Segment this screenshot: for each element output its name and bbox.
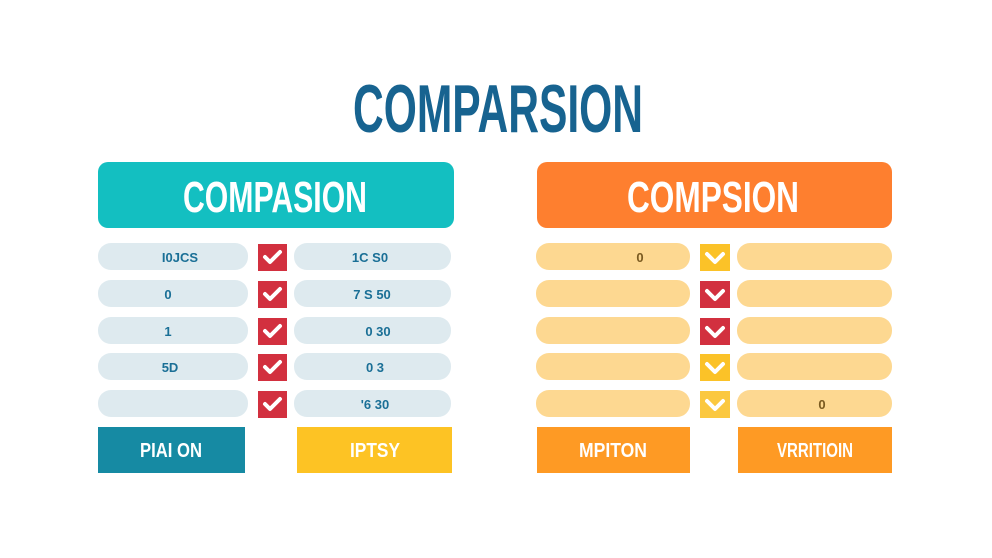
rows: right	[536, 243, 892, 417]
button: PIAI ON: PIAI ON	[140, 440, 202, 462]
rows: left: 7 S 50	[353, 287, 391, 302]
rows: right: 0	[636, 250, 644, 265]
button: MPITON	[537, 427, 690, 473]
button: VRRITIOIN	[738, 427, 892, 473]
button: PIAI ON	[98, 427, 245, 473]
header: left: COMPASION	[183, 173, 367, 222]
button: MPITON: MPITON	[579, 440, 647, 462]
rows: right: 0	[818, 397, 826, 412]
header: right: COMPSION	[627, 173, 799, 222]
checkmarks: left	[258, 244, 287, 418]
panel: right comparison	[536, 162, 892, 473]
rows: left: 5D	[162, 360, 178, 375]
rows: left: 0 3	[366, 360, 384, 375]
rows: left: I0JCS	[162, 250, 198, 265]
rows: left: 1C S0	[352, 250, 388, 265]
rows: left	[98, 243, 451, 417]
rows: left: 0	[164, 287, 172, 302]
rows: left: 0 30	[365, 324, 391, 339]
title: COMPARSION	[353, 71, 643, 147]
header: left	[98, 162, 454, 228]
rows: left: '6 30	[361, 397, 389, 412]
button: IPTSY	[297, 427, 452, 473]
button: IPTSY: IPTSY	[350, 440, 401, 462]
header: right	[537, 162, 892, 228]
checkmarks: right	[700, 244, 730, 418]
panel: left comparison	[98, 162, 454, 473]
button: VRRITIOIN: VRRITIOIN	[777, 440, 853, 462]
rows: left: 1	[164, 324, 172, 339]
